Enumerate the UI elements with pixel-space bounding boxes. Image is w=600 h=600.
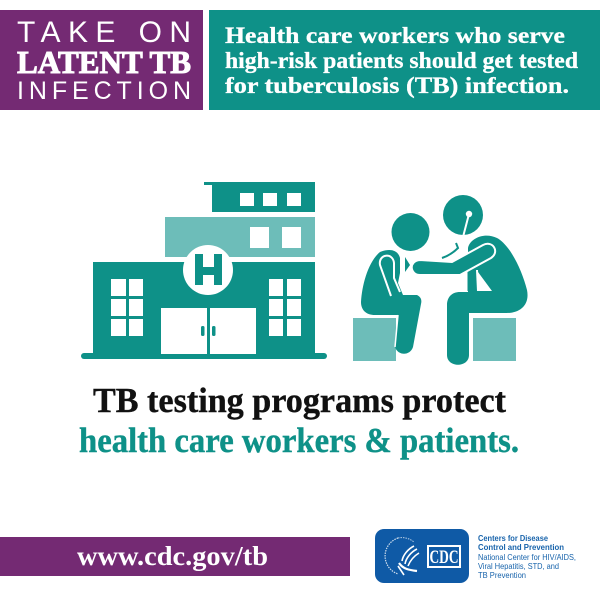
CDC organization text: Viral Hepatitis, STD, and — [478, 561, 559, 571]
title — [17, 16, 191, 105]
header text: for tuberculosis (TB) infection. — [225, 73, 569, 98]
doctor — [412, 195, 528, 365]
main statement: TB testing programs protect — [93, 381, 506, 420]
stethoscope — [442, 211, 472, 258]
CDC organization text: National Center for HIV/AIDS, — [478, 552, 576, 562]
header text: high-risk patients should get tested — [225, 48, 578, 73]
icon: doctor examining patient — [353, 195, 528, 365]
main statement — [79, 381, 519, 460]
title: LATENT TB — [17, 44, 191, 80]
footer url bar: www.cdc.gov/tb — [77, 541, 268, 571]
panel: title banner — [0, 10, 203, 110]
CDC organization text: Control and Prevention — [478, 542, 564, 552]
stools — [353, 318, 516, 361]
title: INFECTION — [17, 77, 191, 105]
CDC organization text: Centers for Disease — [478, 533, 548, 543]
header text — [225, 23, 578, 98]
icon: HHS eagle seal — [385, 538, 419, 575]
CDC logo — [375, 529, 469, 583]
icon: hospital building — [81, 182, 327, 359]
main statement: health care workers & patients. — [79, 421, 519, 460]
footer url bar — [0, 537, 350, 576]
panel: header message — [209, 10, 600, 110]
CDC organization text: TB Prevention — [478, 570, 526, 580]
CDC mark: CDC — [430, 547, 458, 568]
CDC organization text — [478, 533, 576, 580]
patient — [361, 213, 430, 354]
header text: Health care workers who serve — [225, 23, 565, 48]
title: TAKE ON — [17, 16, 191, 49]
